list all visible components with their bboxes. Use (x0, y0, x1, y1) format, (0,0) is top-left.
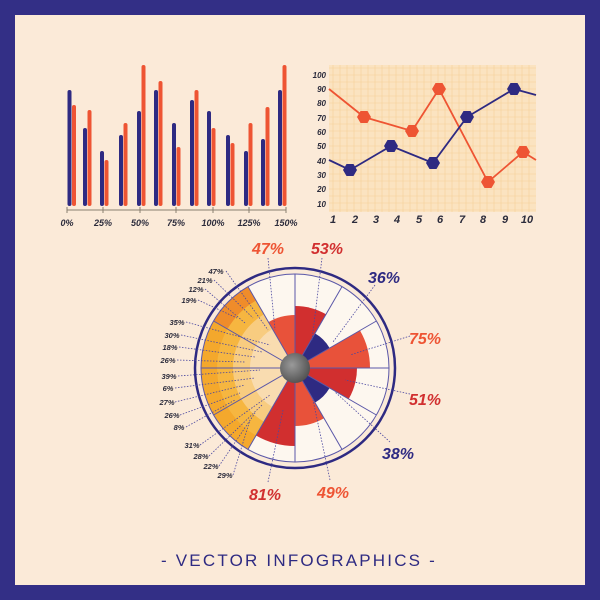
bar chart: 0% (60, 218, 74, 228)
line chart: 6 (437, 214, 444, 226)
small labels: 35% (169, 318, 185, 327)
line chart: 3 (373, 214, 379, 226)
bar chart: 25% (93, 218, 112, 228)
bar chart: 100% (201, 218, 225, 228)
line chart: 100 (313, 71, 327, 80)
small labels: 31% (184, 441, 200, 450)
line chart: 80 (317, 99, 327, 108)
small labels: 22% (202, 462, 219, 471)
orange sectors (201, 287, 295, 449)
small labels: 39% (161, 372, 177, 381)
small labels: 47% (207, 267, 224, 276)
small labels (158, 267, 233, 480)
small labels: 29% (216, 471, 233, 480)
bar chart: 50% (131, 218, 149, 228)
title: - VECTOR INFOGRAPHICS - (161, 551, 437, 570)
line chart: 8 (480, 214, 487, 226)
line chart: 1 (330, 214, 336, 226)
polar chart (158, 241, 441, 504)
small labels: 30% (164, 331, 180, 340)
big labels: 36% (368, 270, 400, 287)
line chart: 9 (502, 214, 509, 226)
line chart: 60 (317, 128, 327, 137)
small labels: 19% (181, 296, 197, 305)
line chart: 40 (316, 157, 327, 166)
line chart: 30 (317, 171, 327, 180)
line chart: 10 (521, 214, 534, 226)
big labels: 51% (409, 392, 441, 409)
small labels: 12% (188, 285, 204, 294)
big labels: 81% (249, 487, 281, 504)
small labels: 6% (163, 384, 174, 393)
line chart: 50 (317, 142, 327, 151)
big labels: 49% (316, 485, 349, 502)
line chart: 5 (416, 214, 423, 226)
bar chart: 150% (274, 218, 298, 228)
big labels: 38% (382, 446, 414, 463)
bar chart: 75% (167, 218, 185, 228)
big labels: 53% (311, 241, 343, 258)
line chart: 2 (351, 214, 358, 226)
small labels: 21% (196, 276, 213, 285)
big labels: 47% (251, 241, 284, 258)
line chart: 4 (393, 214, 400, 226)
small labels: 26% (159, 356, 176, 365)
small labels: 28% (192, 452, 209, 461)
line chart: 90 (317, 85, 327, 94)
bar chart (60, 67, 298, 228)
line chart: 70 (317, 114, 327, 123)
bar chart: 125% (237, 218, 261, 228)
small labels: 26% (163, 411, 180, 420)
line chart: 20 (316, 185, 327, 194)
small labels: 18% (162, 343, 178, 352)
small labels: 8% (174, 423, 185, 432)
line chart: 7 (459, 214, 466, 226)
line chart (313, 65, 536, 226)
leader lines (175, 258, 410, 482)
line chart: 10 (317, 200, 327, 209)
big labels (249, 241, 441, 504)
small labels: 27% (158, 398, 175, 407)
big labels: 75% (409, 331, 441, 348)
